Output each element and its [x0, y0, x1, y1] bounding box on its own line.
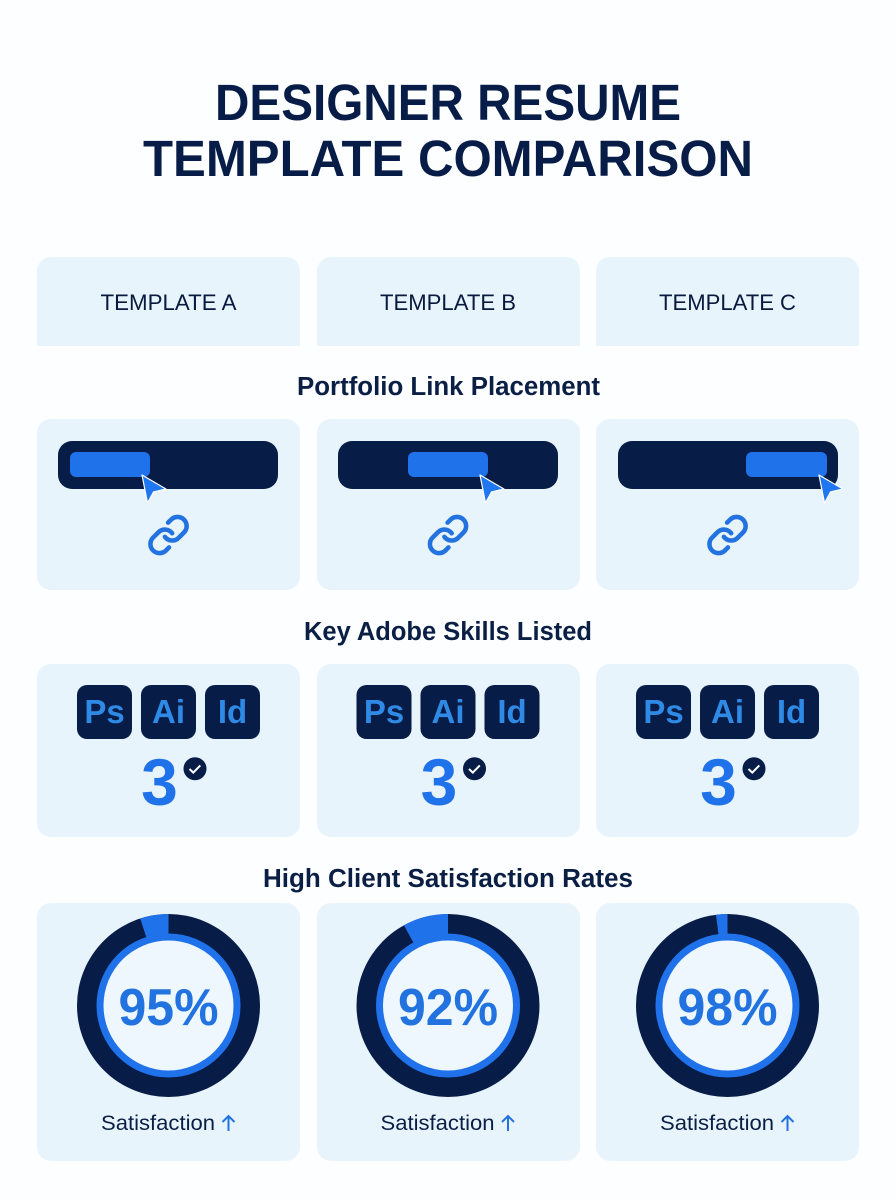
donut chart: 98%: 98% [678, 979, 778, 1037]
label: satisfaction: Satisfaction [380, 1112, 494, 1135]
icon: Id: Id [218, 693, 247, 730]
icon: check badge [742, 757, 766, 780]
icon: cursor [142, 475, 166, 503]
skill count: 3 [700, 745, 737, 819]
donut chart: 95% [77, 914, 260, 1097]
heading: Key Adobe Skills Listed: Key Adobe Skills Listed [304, 618, 592, 646]
icon: Ai: Ai [711, 693, 744, 730]
column header: Template A: TEMPLATE A [100, 290, 236, 315]
icon: Id [764, 685, 819, 739]
panel: skills Template A [37, 664, 300, 837]
header bar with left link [58, 441, 278, 489]
title: TEMPLATE COMPARISON [143, 130, 753, 187]
icon: Ai: Ai [152, 693, 185, 730]
icon: check badge [184, 757, 206, 780]
icon: Id: Id [497, 693, 527, 730]
heading: High Client Satisfaction Rates: High Client Satisfaction Rates [263, 865, 633, 893]
panel: portfolio link Template B [317, 419, 580, 590]
icon: chain link [150, 517, 187, 553]
icon: Ps [356, 685, 412, 739]
donut chart: 92% [356, 914, 540, 1097]
donut chart: 98% [636, 914, 819, 1097]
icon: Ai [141, 685, 196, 739]
icon: cursor [819, 475, 843, 503]
icon: cursor [480, 475, 504, 503]
label: satisfaction: Satisfaction [101, 1112, 215, 1135]
column header: Template B [317, 257, 580, 346]
icon: Ps: Ps [643, 693, 684, 730]
column header: Template A [37, 257, 300, 346]
header bar with centre link [338, 441, 558, 489]
skill count: 3 [141, 745, 178, 819]
icon: Id: Id [777, 693, 806, 730]
icon: chain link [430, 517, 466, 553]
column header: Template C [596, 257, 859, 346]
panel: satisfaction Template C [596, 903, 859, 1161]
panel: skills Template C [596, 664, 859, 837]
header bar with right link [618, 441, 838, 489]
donut chart: 92%: 92% [398, 979, 498, 1037]
label: satisfaction: Satisfaction [660, 1112, 774, 1135]
icon: Ai [700, 685, 755, 739]
skill count: 3 [421, 745, 457, 819]
donut chart: 95%: 95% [118, 979, 218, 1037]
icon: Ps [77, 685, 132, 739]
icon: chain link [709, 517, 746, 553]
panel: skills Template B [317, 664, 580, 837]
panel: portfolio link Template C [596, 419, 859, 590]
panel: portfolio link Template A [37, 419, 300, 590]
icon: Ps [636, 685, 691, 739]
icon: Ai: Ai [432, 693, 464, 730]
icon: Id [484, 685, 540, 739]
column header: Template C: TEMPLATE C [659, 290, 796, 315]
icon: Id [205, 685, 260, 739]
icon: Ai [420, 685, 476, 739]
icon: Ps: Ps [364, 693, 404, 730]
heading: Portfolio Link Placement: Portfolio Link Placement [297, 373, 601, 401]
panel: satisfaction Template A [37, 903, 300, 1161]
icon: Ps: Ps [84, 693, 125, 730]
title: DESIGNER RESUME [215, 74, 681, 131]
icon: check badge [463, 757, 486, 780]
column header: Template B: TEMPLATE B [380, 290, 516, 315]
panel: satisfaction Template B [317, 903, 580, 1161]
title [143, 74, 753, 187]
